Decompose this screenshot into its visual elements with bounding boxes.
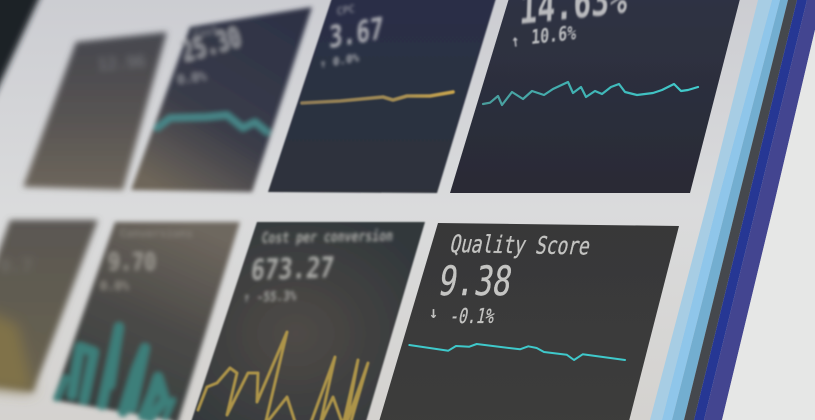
delta: -0.1%	[448, 305, 497, 329]
heading: Cost per conversion	[260, 227, 394, 247]
teal sparkline	[157, 115, 267, 132]
blurred text	[243, 227, 394, 305]
blurred delta: 0.0%	[176, 69, 208, 87]
blurred value: 9.70	[108, 248, 156, 277]
blurred value: 0.7	[0, 256, 33, 277]
value: 9.38	[435, 259, 516, 305]
panel: bottom card 4, Quality Score	[378, 223, 679, 420]
sidebar colour stripes	[650, 0, 815, 420]
blurred heading: Cost	[193, 25, 219, 41]
panel: top card 1 (out of focus)	[23, 32, 167, 190]
blurred heading: Conversions	[120, 227, 193, 240]
panel: bottom card 2	[53, 222, 240, 420]
down arrow: ↓	[429, 302, 438, 322]
small heading: CPC	[337, 4, 355, 18]
dark corner outside screen	[0, 0, 44, 110]
up arrow: ↑	[510, 31, 520, 51]
panel: bottom card 1 (out of focus)	[0, 220, 98, 392]
value: 673.27	[249, 252, 336, 288]
teal sparkline	[409, 344, 625, 360]
panel: top card 4	[450, 0, 741, 193]
value label	[320, 4, 384, 71]
right white edge	[722, 0, 815, 420]
panel: top card 2	[131, 7, 312, 192]
gold line chart	[198, 332, 368, 420]
teal sparkline	[483, 82, 698, 105]
blurred gold chart	[0, 310, 33, 392]
blurred delta: 0.0%	[100, 279, 130, 293]
blurred value: 25.30	[178, 20, 245, 69]
blurred value: 12.96	[97, 52, 146, 74]
panel: bottom card 3	[190, 222, 425, 420]
delta 10.6%: 10.6%	[531, 22, 577, 50]
panel: top card 3	[268, 0, 497, 193]
gold sparkline	[302, 92, 453, 103]
value 3.67: 3.67	[329, 11, 384, 56]
heading: Quality Score	[447, 231, 593, 261]
delta: ↑ 0.0%	[320, 51, 360, 71]
delta: ↑ -55.3%	[243, 288, 298, 305]
teal bars	[57, 327, 173, 418]
